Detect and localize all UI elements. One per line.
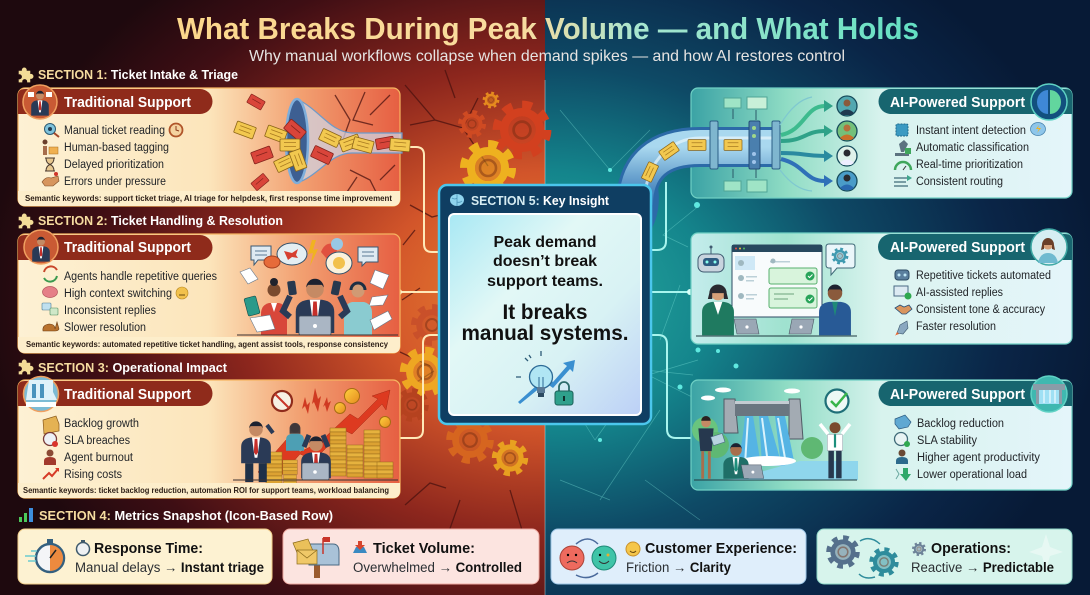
- list: Faster resolution: [916, 321, 996, 333]
- insight text: support teams.: [487, 273, 603, 290]
- metric: customer experience: [551, 529, 806, 584]
- list: High context switching: [64, 288, 172, 300]
- insight heading: SECTION 5: Key Insight: [471, 193, 610, 208]
- insight text: Peak demand: [494, 234, 596, 251]
- overloaded agents illustration: [237, 238, 398, 335]
- funnel illustration: [234, 92, 410, 200]
- header pill: [878, 376, 1072, 412]
- subtitle: Why manual workflows collapse when demand spikes — and how AI restores control: [249, 48, 845, 65]
- title: What Breaks During Peak Volume — and What Holds: [177, 12, 919, 46]
- header pill: [18, 376, 212, 412]
- icon: bulb, arrow and lock: [516, 351, 575, 405]
- icon: mailbox: [293, 537, 339, 578]
- header pill: [878, 229, 1072, 265]
- insight text: [462, 234, 628, 345]
- list: [894, 122, 1046, 188]
- list: Lower operational load: [917, 469, 1027, 481]
- section 3 heading: SECTION 3: Operational Impact: [38, 361, 228, 375]
- metric: ticket volume: Ticket Volume:: [373, 540, 475, 557]
- list: Repetitive tickets automated: [916, 270, 1051, 282]
- decorative gears left: [398, 93, 547, 474]
- header pill: Traditional Support: [64, 387, 191, 403]
- metric: response time: Response Time:: [94, 540, 203, 557]
- list: Inconsistent replies: [64, 305, 156, 317]
- insight text: It breaks: [502, 301, 588, 324]
- list: [894, 270, 1051, 336]
- header pill: Traditional Support: [64, 95, 191, 111]
- metric: response time: [18, 529, 272, 584]
- list: [43, 416, 139, 481]
- list: Real-time prioritization: [916, 159, 1023, 171]
- list: Backlog growth: [64, 418, 139, 430]
- panel: AI-powered support, intake: [636, 84, 1072, 228]
- list: Consistent tone & accuracy: [916, 304, 1045, 316]
- metric: operations: Operations:: [931, 540, 1011, 557]
- list: Manual ticket reading: [64, 125, 165, 137]
- list: Human-based tagging: [64, 142, 169, 154]
- metric: ticket volume: [283, 529, 539, 584]
- list: Delayed prioritization: [64, 159, 164, 171]
- list: [42, 266, 217, 334]
- icon: gears: [829, 538, 897, 578]
- connectors: [396, 147, 693, 438]
- list: Backlog reduction: [917, 418, 1004, 430]
- icon: faces: [560, 539, 616, 578]
- insight text: manual systems.: [462, 322, 628, 345]
- panel: section 5 key insight: [439, 185, 651, 424]
- keywords strip: Semantic keywords: support ticket triage, AI triage for helpdesk, first response time improvement: [25, 193, 392, 203]
- list: Instant intent detection: [916, 125, 1026, 137]
- list: [42, 124, 182, 188]
- header pill: [878, 84, 1072, 120]
- list: SLA stability: [917, 435, 977, 447]
- panel: AI-powered support, handling: [691, 229, 1072, 344]
- keywords strip: [18, 483, 400, 498]
- list: SLA breaches: [64, 435, 130, 447]
- section 4 heading: SECTION 4: Metrics Snapshot (Icon-Based Row): [39, 509, 333, 523]
- metric: operations: [817, 529, 1072, 584]
- keywords strip: Semantic keywords: automated repetitive ticket handling, agent assist tools, response consistency: [26, 339, 388, 349]
- header pill: AI-Powered Support: [890, 95, 1025, 111]
- header pill: AI-Powered Support: [890, 387, 1025, 403]
- cost spiral illustration: [233, 388, 398, 488]
- insight text: doesn’t break: [493, 253, 597, 270]
- keywords strip: [18, 191, 400, 206]
- dam illustration: [692, 388, 858, 480]
- list: Automatic classification: [916, 142, 1029, 154]
- list: Errors under pressure: [64, 176, 166, 188]
- keywords strip: Semantic keywords: ticket backlog reduction, automation ROI for support teams, workload balancing: [23, 485, 389, 495]
- panel: traditional support, operational impact: [18, 376, 400, 498]
- metric: response time: Manual delays → Instant triage: [75, 560, 264, 575]
- section 2 heading: SECTION 2: Ticket Handling & Resolution: [38, 214, 283, 228]
- metric: operations: Reactive → Predictable: [911, 560, 1054, 575]
- list: Consistent routing: [916, 176, 1003, 188]
- list: [894, 415, 1040, 481]
- insight card: [449, 214, 641, 415]
- panel: traditional support, ticket handling: [18, 230, 400, 353]
- list: Higher agent productivity: [917, 452, 1040, 464]
- pipeline illustration: [636, 96, 857, 228]
- list: Slower resolution: [64, 322, 146, 334]
- header pill: [18, 85, 212, 119]
- list: Agents handle repetitive queries: [64, 271, 217, 283]
- header pill: AI-Powered Support: [890, 240, 1025, 256]
- list: Rising costs: [64, 469, 122, 481]
- panel: traditional support, ticket intake: [18, 85, 410, 206]
- icon: stopwatch: [25, 539, 64, 572]
- metric: ticket volume: Overwhelmed → Controlled: [353, 560, 522, 575]
- list: Agent burnout: [64, 452, 134, 464]
- agents with AI screen illustration: [696, 244, 857, 336]
- metric: customer experience: Customer Experience:: [645, 540, 797, 557]
- panel: AI-powered support, impact: [691, 376, 1072, 490]
- list: AI-assisted replies: [916, 287, 1003, 299]
- header pill: [18, 230, 212, 264]
- metric: customer experience: Friction → Clarity: [626, 560, 731, 575]
- header pill: Traditional Support: [64, 240, 191, 256]
- section 1 heading: SECTION 1: Ticket Intake & Triage: [38, 68, 238, 82]
- keywords strip: [18, 337, 400, 353]
